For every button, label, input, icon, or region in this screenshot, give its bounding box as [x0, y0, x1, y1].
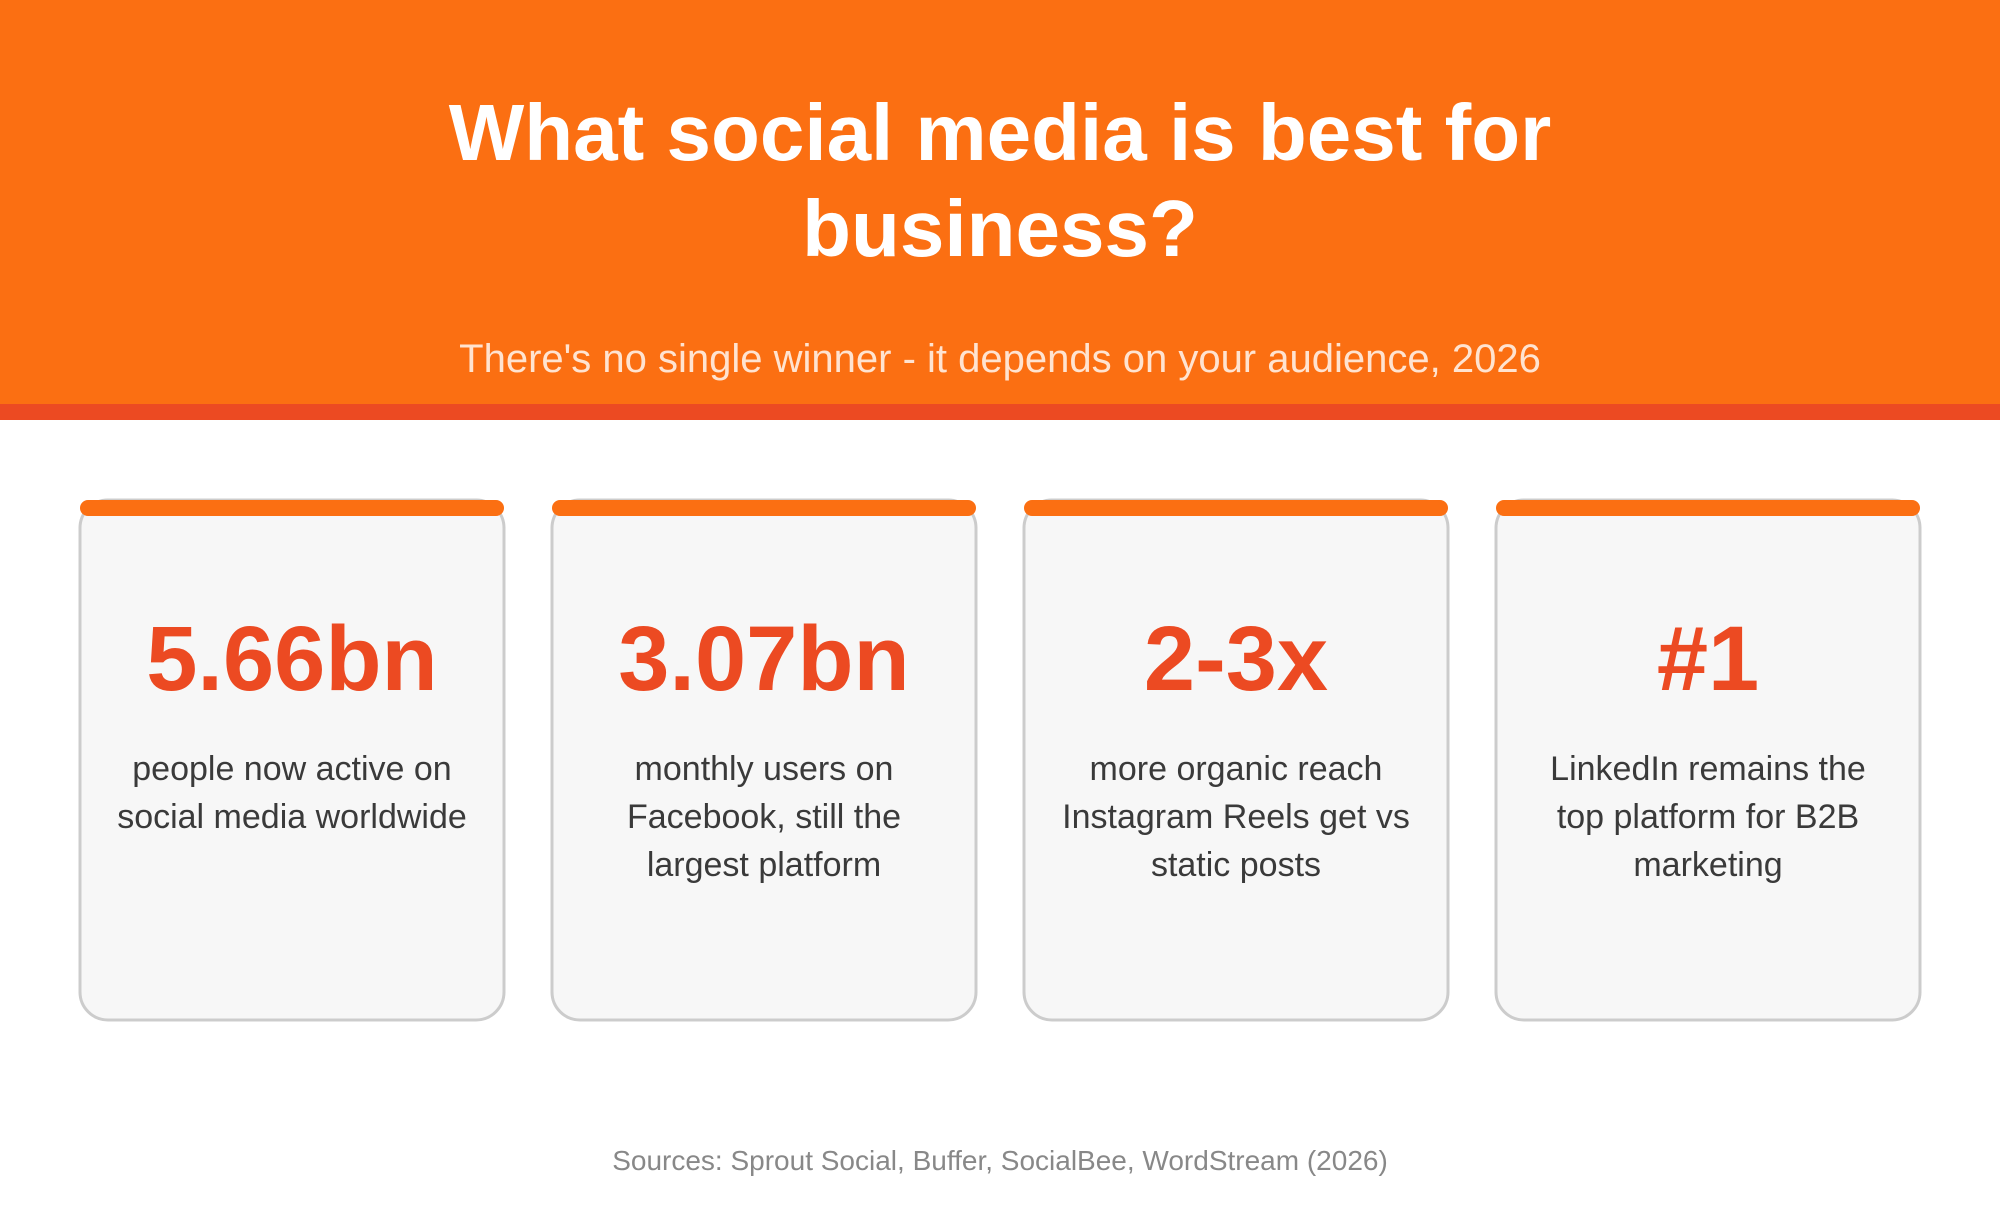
description: card 1: social media worldwide — [117, 798, 467, 836]
title: What social media is best for — [449, 88, 1551, 177]
title: business? — [802, 184, 1198, 273]
panel: card 3 — [1024, 500, 1448, 1020]
description: card 4: LinkedIn remains the — [1550, 750, 1866, 788]
description: card 2: Facebook, still the — [627, 798, 901, 836]
description: card 3: Instagram Reels get vs — [1062, 798, 1410, 836]
subtitle: There's no single winner - it depends on your audience, 2026 — [459, 337, 1541, 381]
description: card 2: largest platform — [647, 846, 881, 884]
sources footer: Sources: Sprout Social, Buffer, SocialBee, WordStream (2026) — [612, 1145, 1388, 1176]
stat: 2-3x: 2-3x — [1144, 608, 1328, 710]
description: card 4: top platform for B2B — [1557, 798, 1859, 836]
panel: card 4 — [1496, 500, 1920, 1020]
description: card 1: people now active on — [132, 750, 452, 788]
stat: 3.07bn: 3.07bn — [618, 608, 910, 710]
description: card 3: more organic reach — [1090, 750, 1382, 788]
description: card 3 — [1062, 750, 1410, 884]
description: card 4 — [1550, 750, 1866, 884]
description: card 2: monthly users on — [635, 750, 893, 788]
description: card 4: marketing — [1633, 846, 1783, 884]
description: card 2 — [627, 750, 901, 884]
stat: #1: #1 — [1657, 608, 1759, 710]
title — [449, 88, 1551, 273]
panel: card 2 — [552, 500, 976, 1020]
description: card 1 — [117, 750, 467, 836]
panel: card 1 — [80, 500, 504, 1020]
stat: 5.66bn: 5.66bn — [146, 608, 438, 710]
header band — [0, 0, 2000, 420]
description: card 3: static posts — [1151, 846, 1321, 884]
